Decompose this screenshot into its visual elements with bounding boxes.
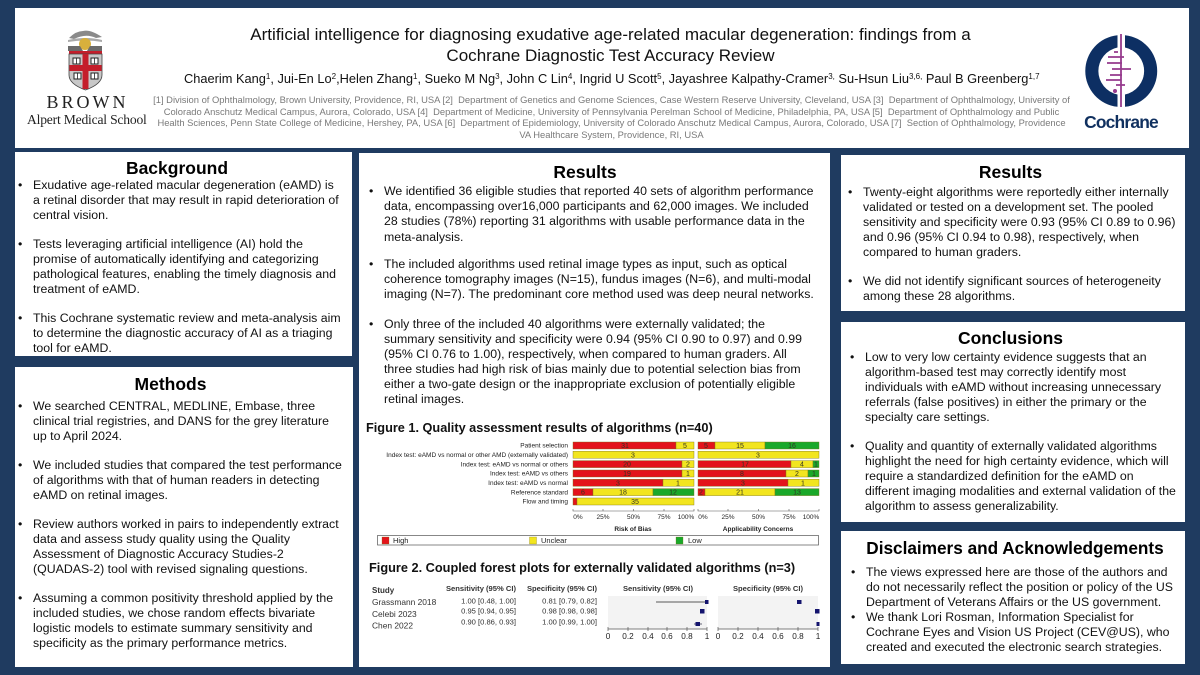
- text: results bullet 2: coherence tomography images (N=15), fundus images (N=6), and multi-modal: [384, 272, 811, 286]
- text: conclusions bullet 1: [865, 350, 1161, 425]
- chart: quality assessment: Index test: eAMD vs normal: [488, 480, 569, 487]
- text: results bullet 3: Only three of the included 40 algorithms were externally validated; the: [384, 317, 765, 331]
- forest plot table: 0.98 [0.98, 0.98]: [542, 606, 597, 616]
- chart: quality assessment: 50%: [627, 514, 640, 521]
- chart: quality assessment: Applicability Concerns: [723, 526, 794, 533]
- header banner: [15, 8, 1189, 148]
- forest plot table: Chen 2022: [372, 620, 413, 630]
- chart: quality assessment: Flow and timing: [522, 499, 568, 506]
- chart: quality assessment: 19: [623, 471, 631, 478]
- title: Cochrane Diagnostic Test Accuracy Review: [446, 46, 775, 65]
- text: methods bullet 2: We included studies that compared the test performance: [33, 458, 342, 472]
- text: conclusions bullet 1: specialty care settings.: [865, 410, 990, 424]
- icon: Cochrane logo: [1085, 34, 1158, 107]
- affiliations: VA Healthcare System, Providence, RI, USA: [519, 129, 704, 140]
- text: background bullet 2: pathological features, enabling the timely diagnosis and: [33, 267, 336, 281]
- text: methods bullet 3: Review authors worked in pairs to independently extract: [33, 516, 339, 530]
- forest plot: sensitivity: Sensitivity (95% CI): [623, 584, 693, 593]
- text: results right bullet 1: [863, 185, 1175, 260]
- chart: quality assessment: 15: [736, 443, 744, 450]
- text: methods bullet 1: up to April 2024.: [33, 429, 122, 443]
- wordmark: Cochrane: Cochrane: [1084, 112, 1158, 132]
- text: results bullet 1: meta-analysis.: [384, 230, 463, 244]
- bars: applicability concerns: [698, 442, 819, 496]
- text: methods bullet 4: [33, 590, 333, 652]
- chart: quality assessment: 20: [623, 462, 631, 469]
- forest plot table: [372, 584, 597, 630]
- text: results bullet 2: imaging (N=7). The predominant core method used was deep neural networks.: [384, 287, 814, 301]
- text: background bullet 3: [33, 310, 341, 356]
- chart legend: Unclear: [541, 536, 567, 545]
- forest plot: specificity: Specificity (95% CI): [733, 584, 803, 593]
- chart legend: Low: [688, 536, 702, 545]
- chart: quality assessment: 100%: [678, 514, 695, 521]
- wordmark: Alpert Medical School: Alpert Medical School: [27, 112, 147, 127]
- text: results right bullet 1: validated or tested on a development set. The pooled: [863, 200, 1153, 214]
- text: background bullet 3: tool for eAMD.: [33, 341, 112, 355]
- text: methods bullet 3: (QUADAS-2) tool with revised signaling questions.: [33, 562, 308, 576]
- chart: quality assessment: Reference standard: [511, 489, 568, 496]
- heading: figure 2: Figure 2. Coupled forest plots for externally validated algorithms (n=3): [369, 560, 795, 575]
- chart: quality assessment: 50%: [752, 514, 765, 521]
- panel: methods: [15, 367, 353, 667]
- text: methods bullet 4: logistic models to estimate summary sensitivity and: [33, 621, 313, 635]
- chart: quality assessment: 0%: [698, 514, 708, 521]
- forest plot: specificity: 1: [816, 632, 821, 641]
- panel: results centre: [359, 153, 830, 667]
- chart: quality assessment: 13: [793, 490, 801, 497]
- chart: quality assessment: 21: [736, 490, 744, 497]
- chart legend: [378, 536, 818, 545]
- chart: quality assessment: 18: [619, 490, 627, 497]
- forest plot: sensitivity: 1: [705, 632, 710, 641]
- text: conclusions bullet 2: different imaging modalities and external validation of the: [865, 484, 1176, 498]
- chart: quality assessment: 1: [814, 462, 818, 469]
- text: methods bullet 4: Assuming a common positivity threshold applied by the: [33, 590, 333, 604]
- text: methods bullet 4: specificity as the primary performance metrics.: [33, 636, 287, 650]
- text: results bullet 1: We identified 36 eligible studies that reported 40 sets of algorithm performance: [384, 184, 813, 198]
- affiliations: [153, 94, 1070, 140]
- bars: risk of bias: [573, 442, 694, 505]
- text: methods bullet 1: [33, 398, 329, 444]
- text: background bullet 2: promise of automatically identifying and categorizing: [33, 252, 319, 266]
- chart: quality assessment: 2: [795, 471, 799, 478]
- forest plot: specificity: 0.6: [772, 632, 784, 641]
- forest plot: specificity: 0.2: [732, 632, 744, 641]
- chart: quality assessment: Risk of Bias: [614, 526, 652, 533]
- chart: quality assessment: 6: [581, 490, 585, 497]
- heading: disclaimers: Disclaimers and Acknowledgements: [866, 538, 1164, 558]
- text: disclaimers bullet 1: [866, 564, 1173, 610]
- chart: quality assessment: 1: [801, 480, 805, 487]
- text: conclusions bullet 2: highlight the need for high certainty evidence, which will: [865, 454, 1169, 468]
- heading: results centre: Results: [553, 162, 617, 182]
- text: results right bullet 2: among these 28 algorithms.: [863, 289, 1015, 303]
- text: background bullet 3: This Cochrane systematic review and meta-analysis aim: [33, 310, 341, 324]
- chart: quality assessment: 31: [621, 443, 629, 450]
- text: background bullet 1: Exudative age-related macular degeneration (eAMD) is: [33, 178, 334, 192]
- forest plot table: 0.95 [0.94, 0.95]: [461, 606, 516, 616]
- chart: quality assessment: 25%: [721, 514, 735, 521]
- chart: quality assessment: 4: [800, 462, 804, 469]
- text: background bullet 2: treatment of eAMD.: [33, 282, 140, 296]
- chart: quality assessment: 3: [616, 480, 620, 487]
- wordmark: Brown: BROWN: [46, 92, 128, 112]
- chart: quality assessment: 0%: [573, 514, 583, 521]
- text: conclusions bullet 1: individuals with eAMD without increasing unnecessary: [865, 380, 1161, 394]
- chart: quality assessment: Index test: eAMD vs others: [490, 471, 569, 478]
- forest plot: specificity: 0.4: [752, 632, 764, 641]
- chart: quality assessment: 1: [686, 471, 690, 478]
- forest plot: sensitivity: 0.2: [622, 632, 634, 641]
- chart: quality assessment: 3: [631, 452, 635, 459]
- chart: quality assessment: [377, 442, 820, 546]
- text: results right bullet 1: and 0.96 (95% CI 0.94 to 0.98), respectively, when: [863, 230, 1139, 244]
- forest plot: sensitivity: 0.4: [642, 632, 654, 641]
- title: Artificial intelligence for diagnosing exudative age-related macular degeneration: findings from a: [250, 25, 971, 44]
- forest plot table: Study: [372, 586, 395, 595]
- text: methods bullet 1: We searched CENTRAL, MEDLINE, Embase, three: [33, 398, 315, 412]
- text: results bullet 2: The included algorithms used retinal image types as input, such as optical: [384, 257, 787, 271]
- forest plot table: 1.00 [0.48, 1.00]: [461, 596, 516, 606]
- heading: methods: Methods: [135, 374, 206, 394]
- chart: quality assessment: 3: [756, 452, 760, 459]
- text: conclusions bullet 1: algorithm-based test may correctly identify most: [865, 365, 1126, 379]
- forest plot table: Sensitivity (95% CI): [446, 584, 516, 593]
- affiliations: Colorado Anschutz Medical Campus, Aurora, Colorado, USA [4] Department of Medicine, University of Pennsylvania Perelman School of Medicine, Philadelphia, PA, USA [5] Department of Ophthalmology and Public: [164, 106, 1059, 117]
- forest plot: specificity: 0.8: [792, 632, 804, 641]
- forest plot table: 0.81 [0.79, 0.82]: [542, 596, 597, 606]
- text: conclusions bullet 2: algorithm to assess generalizability.: [865, 499, 1059, 513]
- authors: Chaerim Kang1, Jui-En Lo2,Helen Zhang1, Sueko M Ng3, John C Lin4, Ingrid U Scott5, Jayashree Kalpathy-Cramer3, Su-Hsun Liu3,6, Paul B Greenberg1,7: [184, 71, 1040, 86]
- text: methods bullet 1: clinical trial registries, and DANS for the grey literature: [33, 414, 329, 428]
- text: background bullet 1: a retinal disorder that may result in rapid deterioration of: [33, 193, 339, 207]
- panel: results right: [841, 155, 1185, 311]
- forest plot table: Specificity (95% CI): [527, 584, 597, 593]
- text: results bullet 1: data, encompassing over16,000 participants and 62,000 images. We included: [384, 199, 809, 213]
- text: background bullet 3: to determine the diagnostic accuracy of AI as a triaging: [33, 326, 332, 340]
- chart: quality assessment: 100%: [803, 514, 820, 521]
- text: conclusions bullet 2: [865, 439, 1176, 514]
- chart: quality assessment: 3: [741, 480, 745, 487]
- text: conclusions bullet 1: Low to very low certainty evidence suggests that an: [865, 350, 1147, 364]
- forest plot table: 1.00 [0.99, 1.00]: [542, 618, 597, 626]
- chart: quality assessment: 2: [686, 462, 690, 469]
- text: results bullet 1: 28 studies (78%) reporting 31 algorithms with usable performance data in the: [384, 214, 805, 228]
- chart legend: High: [393, 536, 408, 545]
- panel: disclaimers: [841, 531, 1185, 664]
- chart: quality assessment: Index test: eAMD vs normal or other AMD (externally validated): [386, 452, 568, 459]
- text: results right bullet 2: We did not identify significant sources of heterogeneity: [863, 274, 1161, 288]
- text: conclusions bullet 1: referrals (false positives) in either the primary or the: [865, 395, 1147, 409]
- chart: quality assessment: 2: [699, 490, 703, 497]
- forest plot: sensitivity: [606, 584, 710, 641]
- affiliations: [1] Division of Ophthalmology, Brown University, Providence, RI, USA [2] Department of Genetics and Genome Sciences, Case Western Reserve University, Cleveland, USA [3] Department of Ophthalmology, University of: [153, 94, 1070, 105]
- text: results bullet 3: (95% CI 0.76 to 1.00), respectively, when compared to human graders. All: [384, 347, 787, 361]
- text: conclusions bullet 2: Quality and quantity of externally validated algorithms: [865, 439, 1157, 453]
- text: results bullet 3: summary sensitivity and specificity were 0.94 (95% CI 0.90 to 0.97) and 0.99: [384, 332, 802, 346]
- text: methods bullet 2: of algorithms with that of human readers in detecting: [33, 473, 319, 487]
- forest plot table: Grassmann 2018: [372, 597, 437, 607]
- chart: quality assessment: 1: [676, 480, 680, 487]
- text: disclaimers bullet 1: do not necessarily reflect the position or policy of the US: [866, 580, 1173, 594]
- text: results right bullet 1: sensitivity and specificity were 0.93 (95% CI 0.89 to 0.96): [863, 215, 1175, 229]
- text: methods bullet 2: [33, 458, 342, 503]
- text: disclaimers bullet 1: Department of Veterans Affairs or the US government.: [866, 594, 1161, 608]
- forest plot: specificity: [716, 584, 821, 641]
- chart: quality assessment: 75%: [657, 514, 671, 521]
- text: disclaimers bullet 2: We thank Lori Rosman, Information Specialist for: [866, 610, 1134, 624]
- text: results bullet 3: either a two-gate design or the inappropriate exclusion of potentially eligible: [384, 377, 795, 391]
- text: results bullet 2: [384, 257, 814, 303]
- text: results bullet 3: three studies had high risk of bias mainly due to potential selection bias from: [384, 362, 801, 376]
- text: results right bullet 2: [863, 274, 1161, 304]
- text: disclaimers bullet 1: The views expressed here are those of the authors and: [866, 564, 1168, 578]
- heading: results right: Results: [979, 162, 1042, 182]
- chart: quality assessment: Patient selection: [520, 442, 568, 450]
- text: methods bullet 2: eAMD on retinal images.: [33, 488, 168, 502]
- chart: quality assessment: 35: [631, 499, 639, 506]
- text: methods bullet 4: included studies, we chose random effects bivariate: [33, 606, 315, 620]
- forest plot table: Celebi 2023: [372, 609, 417, 619]
- chart: quality assessment: 5: [704, 443, 708, 450]
- text: methods bullet 3: [33, 516, 339, 578]
- chart: quality assessment: 5: [683, 443, 687, 450]
- icon: Brown University shield: [68, 30, 102, 90]
- chart: quality assessment: 1: [812, 471, 816, 478]
- heading: figure 1: Figure 1. Quality assessment results of algorithms (n=40): [366, 420, 713, 435]
- chart: quality assessment: Index test: eAMD vs normal or others: [461, 461, 569, 468]
- text: conclusions bullet 2: require a standardized definition for the eAMD on: [865, 469, 1134, 483]
- text: results bullet 3: [384, 317, 802, 407]
- chart: quality assessment: 12: [669, 490, 677, 497]
- text: disclaimers bullet 2: [866, 610, 1170, 654]
- text: methods bullet 3: Assessment of Diagnostic Accuracy Studies-2: [33, 547, 284, 561]
- forest plot: sensitivity: 0.6: [661, 632, 673, 641]
- text: results bullet 3: retinal images.: [384, 392, 464, 406]
- forest plot: specificity: 0: [716, 632, 721, 641]
- text: disclaimers bullet 2: Cochrane Eyes and Vision US Project (CEV@US), who: [866, 624, 1170, 638]
- panel: conclusions: [841, 322, 1185, 522]
- text: background bullet 2: [33, 236, 336, 298]
- forest plot: sensitivity: 0.8: [681, 632, 693, 641]
- heading: background: Background: [126, 158, 228, 178]
- chart: quality assessment: 16: [788, 443, 796, 450]
- text: disclaimers bullet 2: created and executed the electronic search strategies.: [866, 640, 1162, 654]
- text: results bullet 1: [384, 184, 813, 245]
- text: results right bullet 1: Twenty-eight algorithms were reportedly either internally: [863, 185, 1169, 199]
- text: background bullet 2: Tests leveraging artificial intelligence (AI) hold the: [33, 236, 303, 250]
- chart: forest plots: [372, 584, 821, 641]
- panel: background: [15, 152, 352, 356]
- forest plot: sensitivity: 0: [606, 632, 611, 641]
- chart: quality assessment: 8: [740, 471, 744, 478]
- text: background bullet 1: [33, 178, 339, 223]
- chart: quality assessment: 75%: [782, 514, 796, 521]
- text: background bullet 1: central vision.: [33, 208, 108, 222]
- text: methods bullet 3: data and assess study quality using the Quality: [33, 532, 290, 546]
- affiliations: Health Sciences, Penn State College of Medicine, Hershey, PA, USA [6] Department of Epidemiology, University of Colorado Anschutz Medical Campus, Aurora, Colorado, USA [7] Section of Ophthalmology, Providence: [157, 117, 1066, 128]
- chart: quality assessment: 25%: [596, 514, 610, 521]
- text: results right bullet 1: compared to human graders.: [863, 245, 1021, 259]
- heading: conclusions: Conclusions: [958, 328, 1063, 348]
- title: [250, 25, 971, 65]
- chart: quality assessment: 17: [741, 462, 749, 469]
- forest plot table: 0.90 [0.86, 0.93]: [461, 618, 516, 626]
